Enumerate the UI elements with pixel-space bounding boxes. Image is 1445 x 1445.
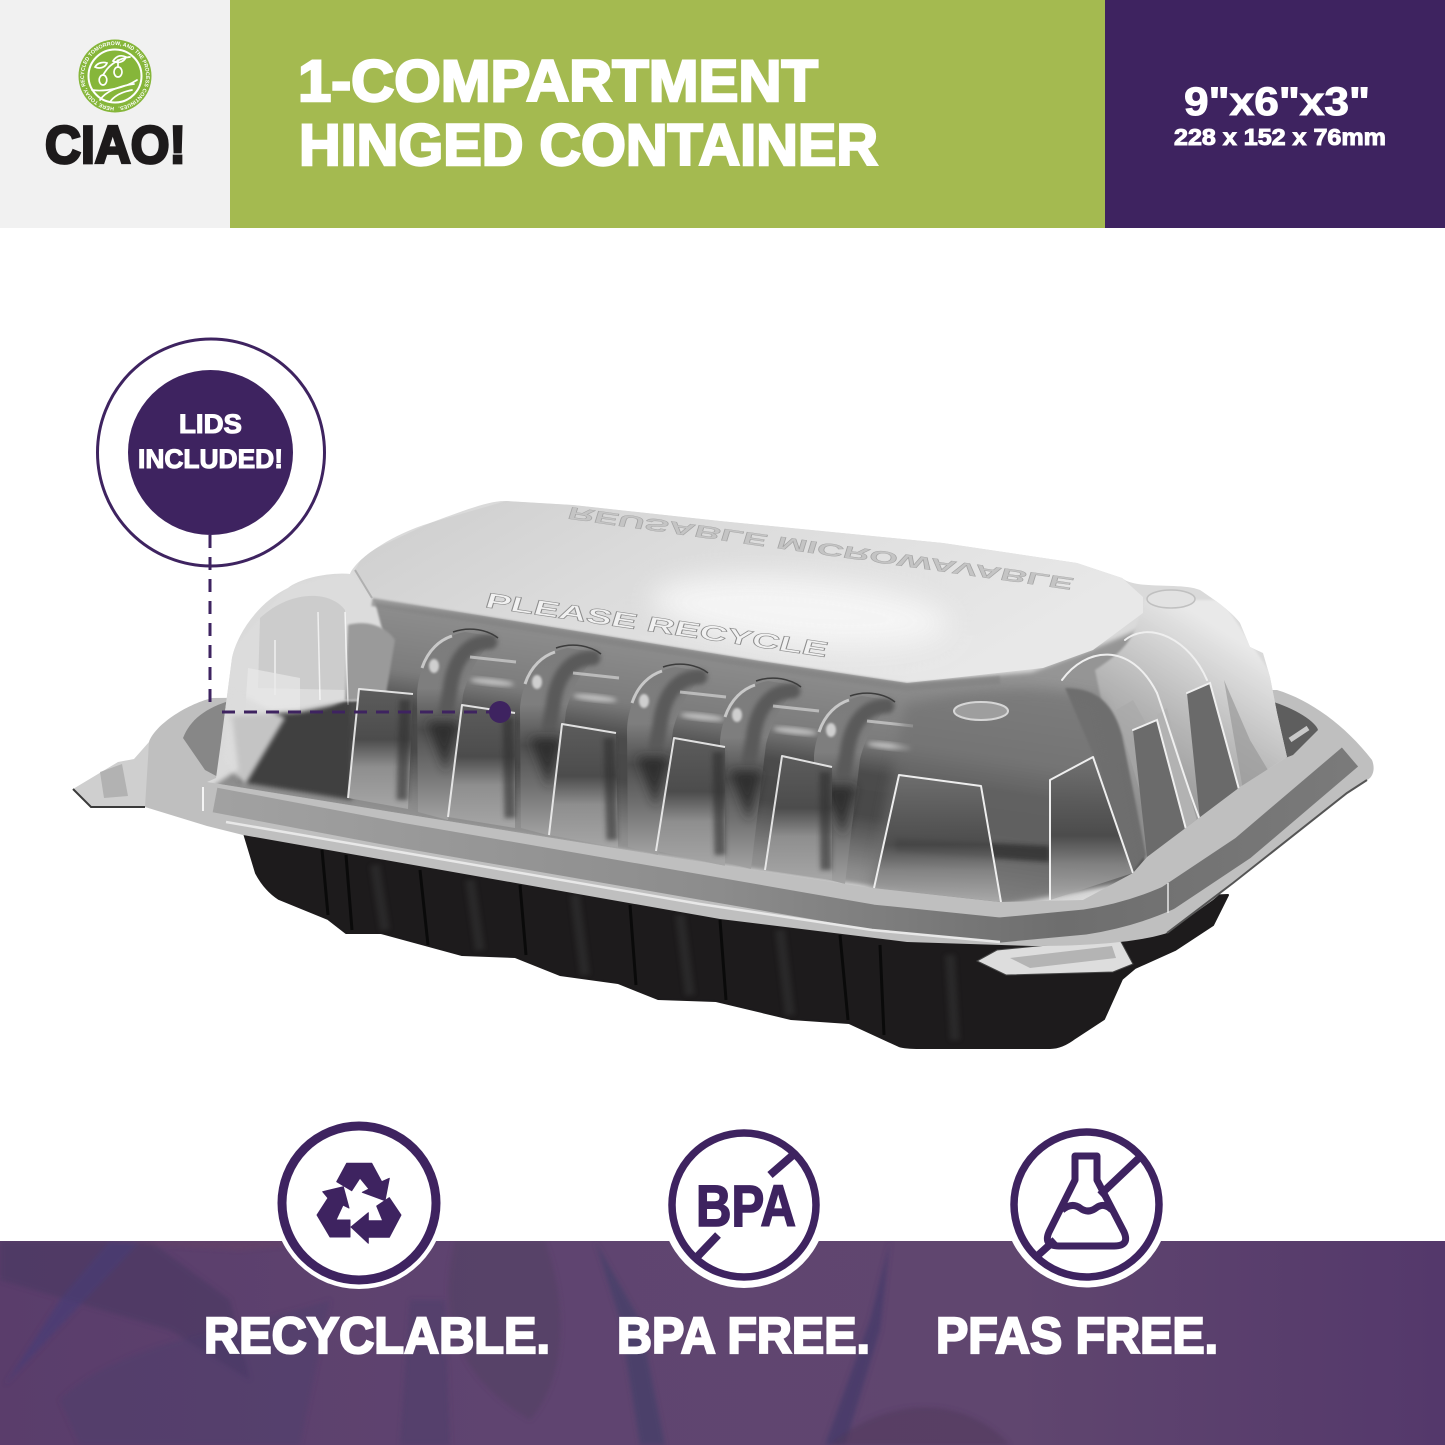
callout: lids included — [98, 339, 324, 566]
embossed lettering: please recycle: PLEASE RECYCLE — [483, 589, 831, 662]
callout pointer — [210, 535, 511, 723]
embossed lettering: reusable microwavable: REUSABLE MICROWAVABLE — [565, 503, 1076, 594]
dark streak — [992, 841, 1049, 864]
right hinge tab — [977, 938, 1133, 975]
label: bpa free: BPA FREE. — [617, 1307, 870, 1364]
window panels — [348, 689, 832, 880]
header bar — [0, 0, 1445, 228]
logo wordmark: CIAO! — [45, 116, 186, 175]
size panel — [1105, 0, 1445, 228]
lid rim — [145, 690, 1374, 946]
icon: olive badge: HERE TODAY, RECYCLED TOMORROW, AND THE PROCESS CONTINUES. — [80, 41, 150, 111]
callout: lids included: INCLUDED! — [138, 444, 283, 474]
product photo: hinged container — [73, 490, 1374, 1048]
black tray base — [243, 830, 1228, 1048]
vertical ribs — [417, 629, 913, 884]
clear left corner — [224, 596, 395, 802]
clear dome lid — [200, 490, 1310, 920]
dimensions: 9"x6"x3" — [1184, 80, 1370, 124]
callout: lids included: LIDS — [179, 409, 242, 439]
interior seen through lid — [207, 602, 1190, 905]
icon: recyclable — [273, 1117, 445, 1289]
label: recyclable: RECYCLABLE. — [204, 1307, 550, 1364]
rim inner tray right — [1270, 701, 1318, 760]
clear right side — [1062, 600, 1295, 874]
left hinge tab — [73, 742, 160, 810]
rim inner shadow left — [183, 700, 232, 778]
plateau top of lid — [355, 501, 1143, 687]
dimensions — [1174, 80, 1386, 150]
label: pfas free: PFAS FREE. — [936, 1307, 1218, 1364]
plateau highlight — [652, 571, 941, 650]
footer band with leaf texture — [0, 1241, 1445, 1445]
icon: pfas free — [1004, 1122, 1170, 1288]
stack buttons — [954, 702, 1008, 720]
front-right body — [866, 688, 1093, 902]
title panel — [230, 0, 1105, 228]
panel right dark stripes — [402, 700, 826, 870]
title: 1-COMPARTMENT — [298, 49, 818, 114]
logo panel — [0, 0, 230, 228]
dimensions: 228 x 152 x 76mm — [1174, 124, 1386, 150]
icon: bpa free: BPA — [696, 1174, 796, 1239]
right window panels — [874, 757, 1133, 902]
icon: bpa free — [661, 1122, 827, 1288]
panel bright edges — [348, 689, 832, 870]
title — [298, 49, 878, 178]
title: HINGED CONTAINER — [299, 113, 878, 178]
